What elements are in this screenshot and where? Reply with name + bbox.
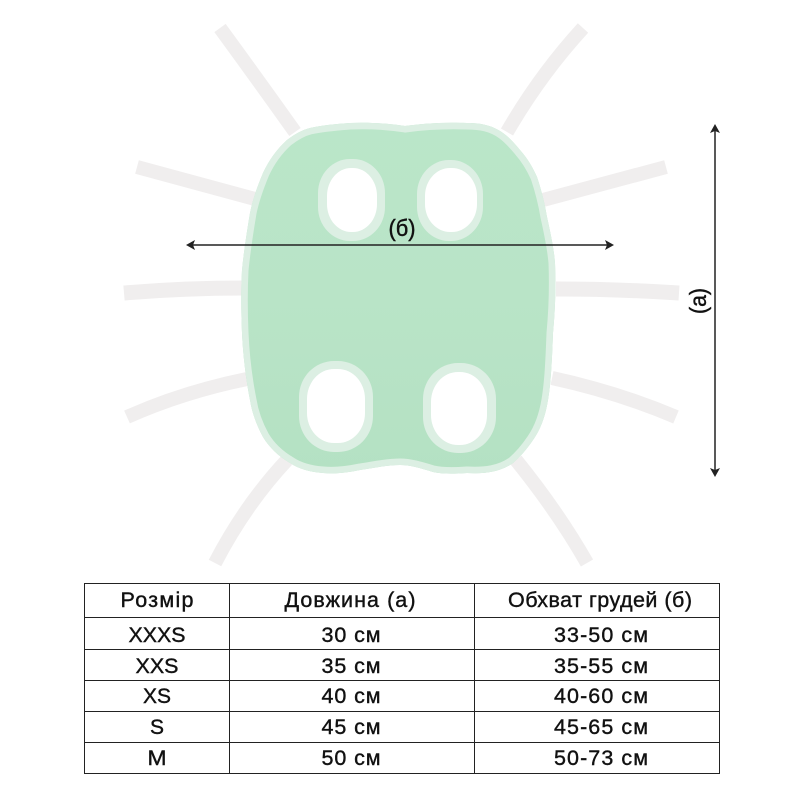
table header: Розмір — [120, 588, 194, 612]
ties: ten white straps — [124, 28, 679, 563]
garment: recovery vest with ties — [124, 28, 679, 563]
row: XS: XS — [143, 684, 171, 708]
row: XS: 40 см — [322, 684, 380, 708]
row: S: S — [150, 715, 164, 739]
row: XS — [143, 684, 648, 708]
leg opening: bottom left — [299, 361, 373, 452]
size table — [84, 583, 720, 774]
label: (б): (б) — [388, 215, 416, 241]
table header — [120, 588, 692, 612]
row: XXXS: XXXS — [128, 623, 186, 647]
row: XXS — [136, 654, 648, 678]
table header: Довжина (а) — [284, 588, 416, 612]
row: XXXS — [128, 623, 648, 647]
row: M: M — [148, 746, 166, 770]
row: M: 50-73 см — [554, 746, 648, 770]
row: XXS: 35 см — [322, 654, 380, 678]
label: (а): (а) — [685, 288, 711, 314]
row: XXXS: 30 см — [322, 623, 380, 647]
table grid — [84, 583, 720, 774]
vest body with pale trim — [235, 115, 565, 480]
row: M — [148, 746, 648, 770]
table header: Обхват грудей (б) — [508, 588, 692, 612]
arrow: chest width (б) — [186, 240, 614, 250]
arrow: length (а) — [710, 124, 720, 477]
leg opening: bottom right — [423, 363, 496, 453]
row: XXS: XXS — [136, 654, 178, 678]
row: M: 50 см — [322, 746, 380, 770]
row: S — [150, 715, 648, 739]
leg opening: top right — [417, 160, 483, 241]
row: XXS: 35-55 см — [554, 654, 648, 678]
row: XS: 40-60 см — [554, 684, 648, 708]
leg opening: top left — [318, 159, 385, 241]
row: S: 45 см — [322, 715, 380, 739]
row: S: 45-65 см — [554, 715, 648, 739]
row: XXXS: 33-50 см — [554, 623, 648, 647]
